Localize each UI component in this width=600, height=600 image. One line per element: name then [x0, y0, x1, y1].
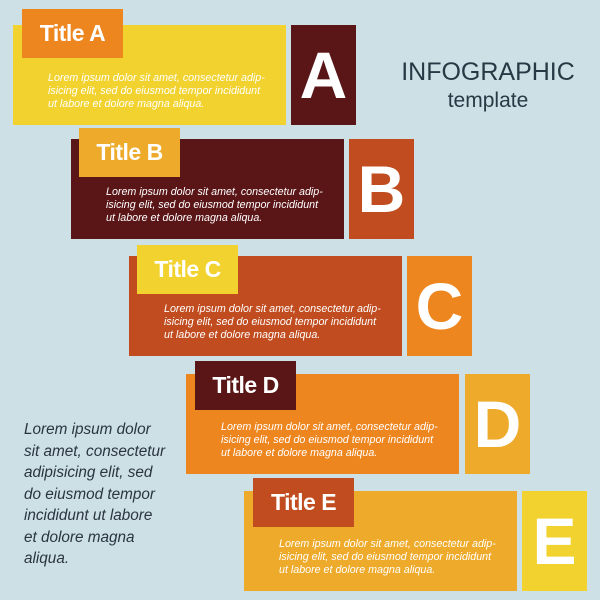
letter E [522, 491, 587, 591]
text: D body: Lorem ipsum dolor sit amet, consectetur adip- [221, 421, 438, 433]
letter D [465, 374, 530, 474]
letter C: C [416, 269, 463, 343]
text: B body: ut labore et dolore magna aliqua. [106, 212, 262, 224]
panel: C [129, 256, 402, 356]
text: C body: isicing elit, sed do eiusmod tempor incididunt [164, 316, 376, 328]
title A [22, 9, 123, 58]
title D: Title D [212, 372, 279, 398]
title B: Title B [96, 139, 163, 165]
title E [253, 478, 354, 527]
title E: Title E [271, 489, 336, 515]
letter D: D [474, 387, 521, 461]
panel: A [13, 25, 286, 125]
side text: sit amet, consectetur [24, 442, 165, 460]
heading: template [448, 89, 528, 112]
letter A [291, 25, 356, 125]
letter C [407, 256, 472, 356]
title C [137, 245, 238, 294]
side text: Lorem ipsum dolor [24, 421, 151, 438]
text: C body [164, 303, 381, 341]
text: A body [48, 72, 265, 110]
side text: aliqua. [24, 550, 69, 567]
text: A body: ut labore et dolore magna aliqua. [48, 98, 204, 110]
text: D body: ut labore et dolore magna aliqua. [221, 447, 377, 459]
text: D body [221, 421, 438, 459]
title A: Title A [40, 20, 105, 46]
panel: B [71, 139, 344, 239]
side text: adipisicing elit, sed [24, 464, 152, 481]
title D [195, 361, 296, 410]
text: A body: Lorem ipsum dolor sit amet, consectetur adip- [48, 72, 265, 84]
side text: do eiusmod tempor [24, 486, 155, 502]
text: B body: isicing elit, sed do eiusmod tempor incididunt [106, 199, 318, 211]
text: C body: Lorem ipsum dolor sit amet, consectetur adip- [164, 303, 381, 315]
text: E body: ut labore et dolore magna aliqua. [279, 564, 435, 576]
text: E body: Lorem ipsum dolor sit amet, consectetur adip- [279, 538, 496, 550]
text: E body [279, 538, 496, 576]
side text [24, 421, 166, 567]
letter E: E [532, 504, 577, 578]
heading [401, 58, 575, 112]
letter A: A [300, 38, 347, 112]
text: D body: isicing elit, sed do eiusmod tempor incididunt [221, 434, 433, 446]
text: C body: ut labore et dolore magna aliqua. [164, 329, 320, 341]
letter B [349, 139, 414, 239]
text: A body: isicing elit, sed do eiusmod tempor incididunt [48, 85, 260, 97]
text: B body: Lorem ipsum dolor sit amet, consectetur adip- [106, 186, 323, 198]
letter B: B [358, 152, 405, 226]
side text: et dolore magna [24, 528, 135, 546]
panel: D [186, 374, 459, 474]
side text: incididunt ut labore [24, 507, 152, 524]
title B [79, 128, 180, 177]
heading: INFOGRAPHIC [401, 58, 575, 86]
text: E body: isicing elit, sed do eiusmod tempor incididunt [279, 551, 491, 563]
text: B body [106, 186, 323, 224]
panel: E [244, 491, 517, 591]
title C: Title C [154, 256, 221, 282]
